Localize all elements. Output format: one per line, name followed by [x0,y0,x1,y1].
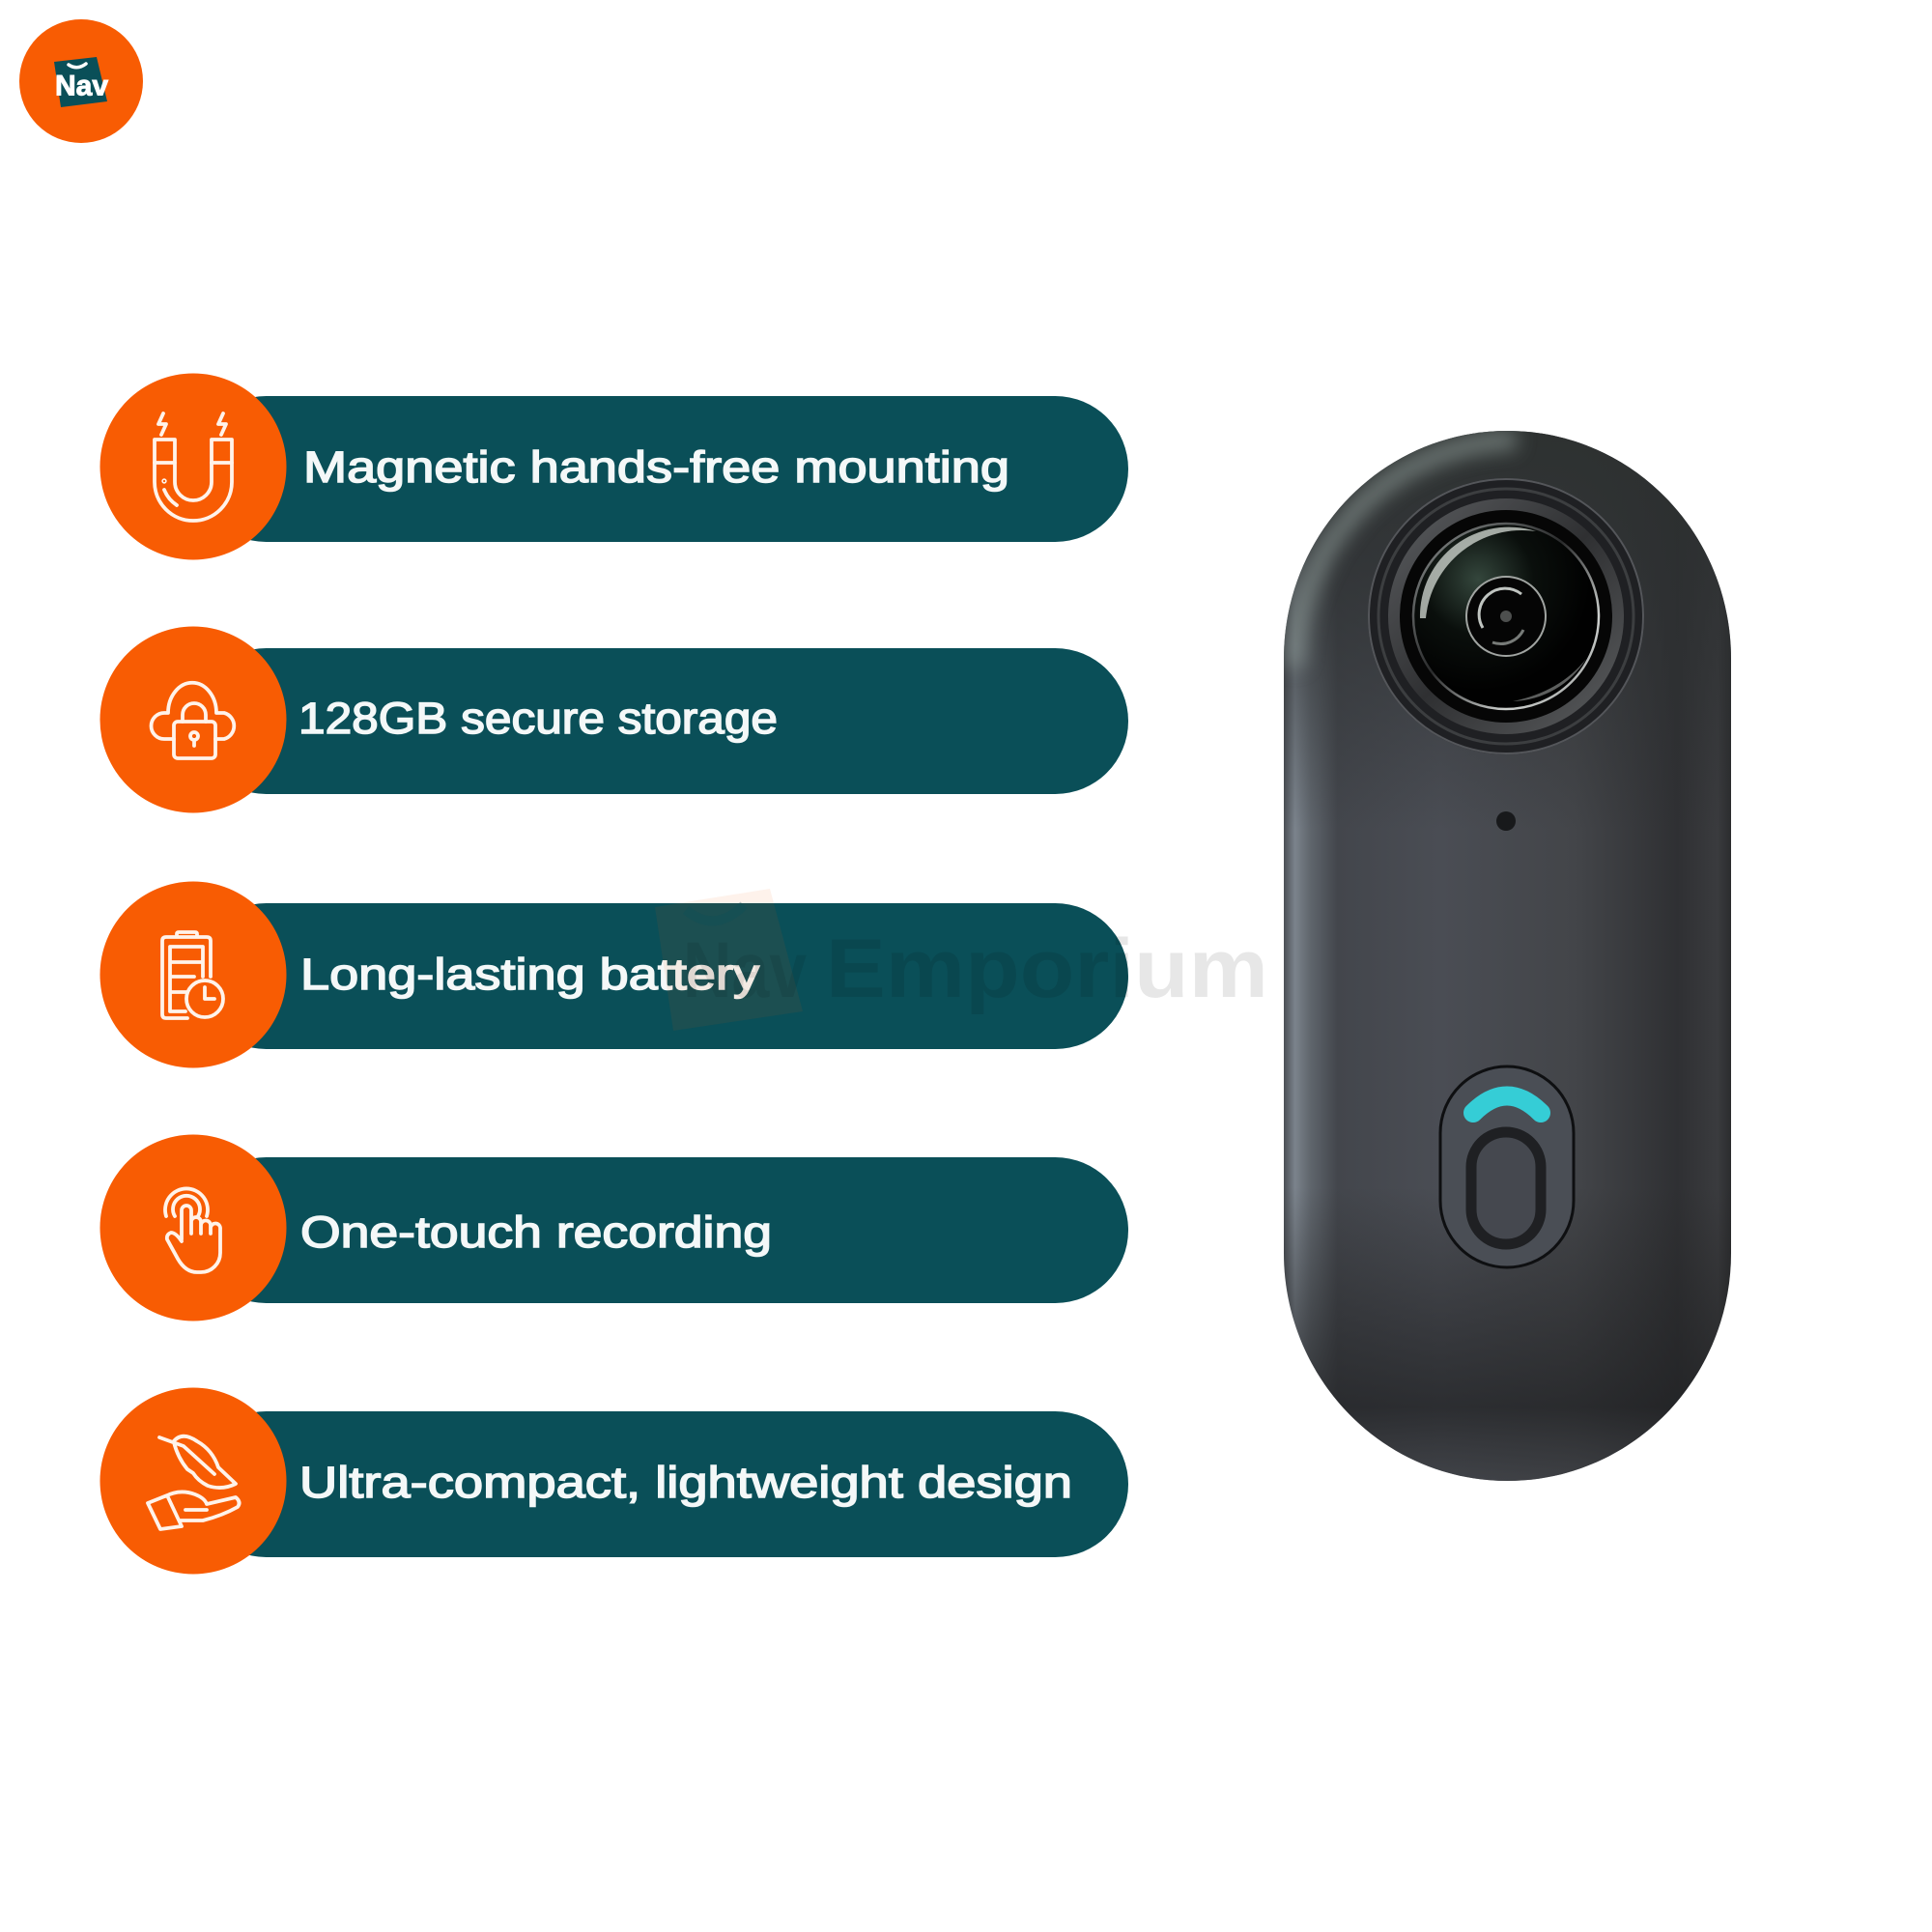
icon: battery with clock [162,932,223,1018]
camera lens [1368,478,1644,754]
watermark [655,889,1268,1031]
feature row: battery: Long-lasting battery [300,950,760,999]
feature row: secure storage [100,626,1128,813]
icon: feather over hand [148,1436,240,1529]
watermark: Emporium [826,923,1268,1015]
icon: magnet [155,413,232,521]
feature row: one-touch: One-touch recording [300,1208,772,1257]
watermark: Nav [683,926,807,1014]
feature row: one-touch [100,1134,1128,1321]
microphone dot [1496,811,1516,831]
feature row: secure storage: 128GB secure storage [298,694,778,743]
feature row: magnetic mounting [100,373,1128,560]
feature row: lightweight [100,1387,1128,1575]
feature row: battery [100,881,1128,1068]
record button [1440,1066,1574,1267]
camera body [1284,431,1731,1481]
camera product [1284,431,1731,1481]
feature row: lightweight: Ultra-compact, lightweight design [299,1458,1072,1507]
icon: touch hand [165,1188,220,1272]
feature row: magnetic mounting: Magnetic hands-free mounting [303,442,1009,492]
icon: cloud with padlock [151,683,234,758]
logo badge: Nav [55,70,108,102]
logo badge [19,19,143,143]
